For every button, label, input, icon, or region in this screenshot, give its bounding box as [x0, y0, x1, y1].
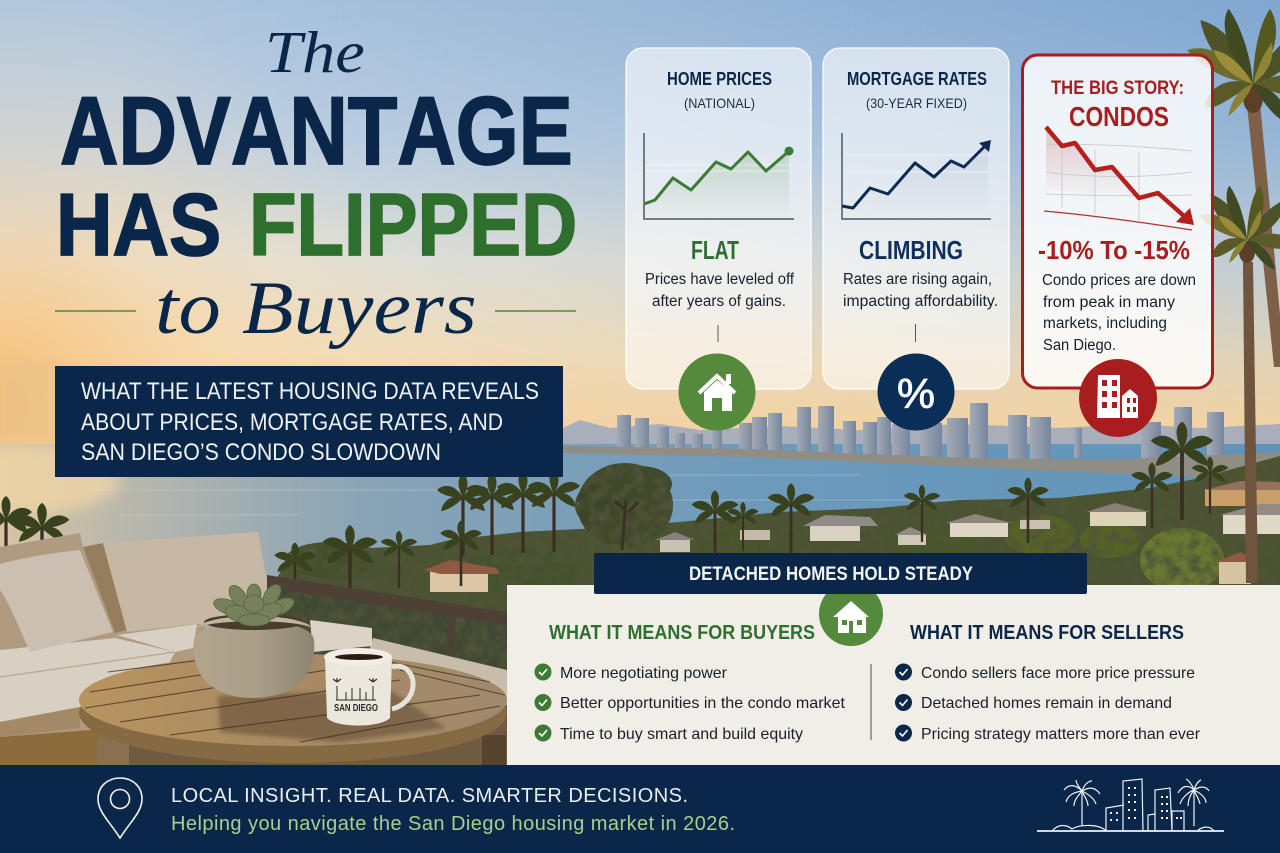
patio floor behind furniture	[0, 640, 507, 765]
footer tagline: LOCAL INSIGHT. REAL DATA. SMARTER DECISIONS.	[171, 785, 688, 807]
panel: what it means	[507, 553, 1280, 765]
description: mortgage rates	[843, 271, 998, 310]
panel: home prices: (NATIONAL)	[684, 95, 755, 111]
subtitle banner: ABOUT PRICES, MORTGAGE RATES, AND	[81, 409, 503, 436]
description: home prices	[645, 271, 795, 310]
stat: condo decline: -10% To -15%	[1038, 235, 1190, 265]
deck	[0, 720, 120, 765]
distant hills	[0, 360, 1280, 470]
list: buyers: More negotiating power	[560, 665, 728, 682]
list: buyers: Better opportunities in the condo market	[560, 695, 846, 712]
waterfront city strip	[563, 446, 1280, 500]
footer subline: Helping you navigate the San Diego housing market in 2026.	[171, 813, 735, 835]
description: condos: from peak in many	[1043, 294, 1175, 311]
panel: mortgage rates	[823, 48, 1009, 430]
icon: map pin	[98, 778, 142, 838]
panel: home prices	[626, 48, 811, 430]
coffee mug	[324, 648, 413, 726]
chart: condo price decline	[1044, 127, 1194, 230]
downtown skyline towers	[617, 403, 1224, 467]
list: sellers: Condo sellers face more price pressure	[921, 665, 1195, 682]
subtitle banner: WHAT THE LATEST HOUSING DATA REVEALS	[81, 378, 539, 405]
sky	[0, 0, 1280, 470]
subtitle banner	[55, 366, 563, 477]
mug label: SAN DIEGO	[334, 703, 378, 714]
list: sellers	[895, 664, 1201, 743]
subtitle banner: SAN DIEGO’S CONDO SLOWDOWN	[81, 439, 441, 466]
railing	[267, 575, 507, 705]
description: mortgage rates: Rates are rising again,	[843, 271, 992, 288]
list: buyers	[534, 664, 846, 743]
hillside vegetation	[267, 456, 1280, 640]
stat: climbing: CLIMBING	[859, 235, 963, 265]
tall palm trees	[1187, 9, 1280, 583]
title: to Buyers: Buyers	[242, 267, 477, 350]
title: HAS: HAS	[56, 174, 221, 274]
description: home prices: Prices have leveled off	[645, 271, 795, 288]
description: condos: markets, including	[1043, 315, 1167, 332]
heading: sellers: WHAT IT MEANS FOR SELLERS	[910, 622, 1184, 644]
description: condos	[1042, 272, 1196, 354]
banner: detached homes hold steady: DETACHED HOMES HOLD STEADY	[689, 564, 973, 585]
title: to Buyers: to	[155, 267, 221, 350]
description: condos: Condo prices are down	[1042, 272, 1196, 289]
list: buyers: Time to buy smart and build equity	[560, 726, 803, 743]
small palms on hillside	[0, 422, 1228, 611]
ocean and bay	[0, 444, 1280, 644]
description: mortgage rates: impacting affordability.	[843, 293, 998, 310]
eucalyptus tree	[575, 466, 672, 550]
description: home prices: after years of gains.	[652, 293, 786, 310]
banner: detached homes hold steady	[594, 553, 1087, 594]
chart: home prices line	[644, 133, 794, 219]
icon: percent	[878, 354, 954, 430]
chart: mortgage rates line	[842, 133, 991, 219]
title rules	[55, 310, 576, 312]
list: sellers: Pricing strategy matters more than ever	[921, 726, 1201, 743]
round wooden table	[79, 654, 507, 765]
title: ADVANTAGE: ADVANTAGE	[60, 76, 573, 185]
description: condos: San Diego.	[1043, 337, 1116, 354]
hillside houses	[424, 481, 1280, 592]
sofa	[0, 532, 372, 737]
icon: condo buildings	[1079, 359, 1157, 437]
list: sellers: Detached homes remain in demand	[921, 695, 1172, 712]
panel: condos: CONDOS	[1069, 101, 1169, 132]
heading: home prices: HOME PRICES	[667, 69, 772, 89]
icon: skyline with palms	[1037, 779, 1224, 831]
icon: detached home	[819, 582, 883, 646]
footer bar	[0, 765, 1280, 853]
concrete planter with succulent	[194, 581, 314, 698]
panel: mortgage rates: (30-YEAR FIXED)	[866, 95, 967, 111]
title	[56, 19, 577, 350]
title: The: The	[265, 19, 365, 85]
stat: flat: FLAT	[691, 235, 739, 265]
panel: condos	[1022, 55, 1212, 437]
heading: mortgage rates: MORTGAGE RATES	[847, 69, 987, 89]
title: FLIPPED: FLIPPED	[249, 175, 577, 274]
heading: the big story: THE BIG STORY:	[1051, 78, 1184, 99]
patio foreground	[0, 532, 507, 765]
icon: percent: %	[897, 370, 935, 417]
heading: buyers: WHAT IT MEANS FOR BUYERS	[549, 622, 815, 644]
icon: house	[678, 354, 756, 430]
background: coastal San Diego photo scene	[0, 0, 1280, 644]
